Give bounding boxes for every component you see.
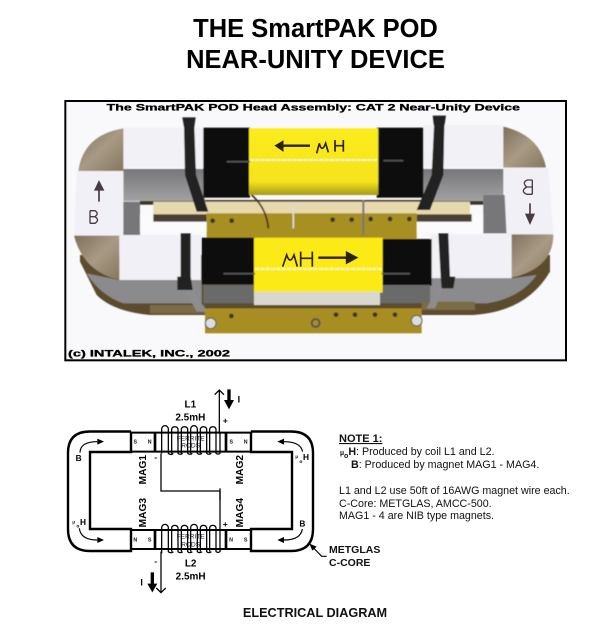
- note: specifications: C-Core: METGLAS, AMCC-500.: [339, 498, 492, 510]
- handwritten mark: right B field: [523, 180, 534, 223]
- label: L1 value: 2.5mH: [175, 413, 205, 424]
- text: mu-H top right: µ: [295, 454, 298, 459]
- handwritten marks: lower coil: [283, 252, 357, 267]
- text: mu-H top right: o: [299, 459, 302, 465]
- label: metglas c-core: C-CORE: [329, 557, 370, 569]
- caption: electrical diagram: ELECTRICAL DIAGRAM: [243, 606, 387, 620]
- text: B bottom right: B: [299, 519, 305, 529]
- arrow: B field top left: [80, 439, 104, 453]
- C-core: top left and right: [68, 432, 313, 490]
- title: THE SmartPAK POD: [193, 15, 438, 43]
- text: minus bottom: -: [154, 556, 157, 566]
- text: minus top: -: [154, 452, 157, 462]
- text: I top: I: [238, 394, 240, 404]
- label: MAG3: MAG3: [138, 498, 149, 527]
- label: ferrite rods top: [177, 436, 205, 450]
- arrow: H field top right: [277, 439, 303, 452]
- wire and arrow: bottom lead: [156, 552, 166, 593]
- label: MAG2: MAG2: [235, 455, 246, 484]
- label: ferrite rods top: FERRITE: [177, 436, 205, 443]
- wire: center lead to top: [218, 488, 222, 530]
- label: MAG4: MAG4: [235, 498, 246, 527]
- title: NEAR-UNITY DEVICE: [186, 46, 445, 74]
- top magnets and ferrite rods: [76, 389, 309, 500]
- photo caption: head assembly title: The SmartPAK POD Head Assembly: CAT 2 Near-Unity Device: [107, 103, 520, 113]
- note: H definition: o: [344, 453, 348, 460]
- label: magnet poles bottom: S: [148, 538, 152, 544]
- title: [186, 15, 445, 74]
- text: plus bottom: +: [223, 519, 228, 529]
- label: ferrite rods bottom: FERRITE: [177, 534, 205, 541]
- label: L2 value: 2.5mH: [176, 572, 206, 583]
- C-core: bottom left and right: [68, 490, 313, 551]
- label: magnet poles top: S: [134, 440, 138, 446]
- text: mu-H bottom left: H: [80, 517, 86, 527]
- text: mu-H bottom left: [72, 517, 86, 530]
- note: H definition: µ: [340, 450, 344, 457]
- note heading: NOTE 1:: [339, 433, 382, 445]
- coil L2: [162, 524, 220, 553]
- label: magnet poles bottom: N: [229, 538, 233, 544]
- note: B definition: B: Produced by magnet MAG1 - MAG4.: [351, 459, 539, 471]
- handwritten mark: left B field: [90, 182, 103, 223]
- arrow: current I top: [224, 389, 234, 409]
- label: ferrite rods bottom: [177, 534, 205, 549]
- label: L1 value: L1: [185, 400, 197, 411]
- label: magnet poles bottom: N: [133, 538, 137, 544]
- label: magnet poles top: [134, 440, 248, 446]
- label: L2 value: [176, 558, 206, 583]
- label: magnet poles top: N: [148, 440, 152, 446]
- label: metglas c-core: METGLAS: [329, 544, 380, 556]
- wire and arrow: top lead: [215, 390, 224, 433]
- label: magnet poles top: S: [230, 440, 234, 446]
- electrical diagram: [68, 389, 327, 593]
- text: B top left: B: [76, 453, 82, 463]
- label: MAG1: MAG1: [138, 455, 149, 484]
- label: metglas c-core: [329, 544, 380, 569]
- note: specifications: L1 and L2 use 50ft of 16AWG magnet wire each.: [339, 485, 570, 497]
- label: ferrite rods top: RODS: [181, 443, 201, 450]
- arrow: B field bottom right: [277, 529, 302, 543]
- photo: head assembly: [65, 101, 566, 360]
- note: specifications: [339, 485, 570, 522]
- text: mu-H bottom left: o: [76, 524, 79, 530]
- label: L1 value: [175, 400, 205, 424]
- handwritten marks: upper coil: [276, 140, 343, 153]
- arrow: metglas pointer: [309, 544, 327, 556]
- photo credit: (c) INTALEK, INC., 2002: [68, 349, 230, 359]
- note: H definition: : Produced by coil L1 and L2.: [356, 446, 494, 458]
- photo: device body: [74, 116, 553, 333]
- note 1: [339, 433, 570, 522]
- text: plus top: +: [223, 416, 228, 426]
- coil L1: [162, 426, 220, 454]
- label: magnet poles top: N: [244, 440, 248, 446]
- note: specifications: MAG1 - 4 are NIB type magnets.: [339, 510, 494, 522]
- note: H definition: H: [348, 446, 356, 458]
- arrow: current I bottom: [147, 572, 157, 592]
- wire: center crossover: [161, 453, 220, 500]
- arrow: H field bottom left: [79, 528, 104, 543]
- label: ferrite rods bottom: RODS: [181, 542, 201, 549]
- text: mu-H top right: H: [303, 452, 309, 462]
- label: magnet poles bottom: [133, 538, 248, 544]
- bottom magnets and ferrite rods: [72, 488, 327, 593]
- label: magnet poles bottom: S: [244, 538, 248, 544]
- text: mu-H top right: [295, 452, 309, 465]
- label: L2 value: L2: [185, 558, 197, 569]
- text: I bottom: I: [140, 577, 143, 587]
- text: mu-H bottom left: µ: [72, 519, 75, 524]
